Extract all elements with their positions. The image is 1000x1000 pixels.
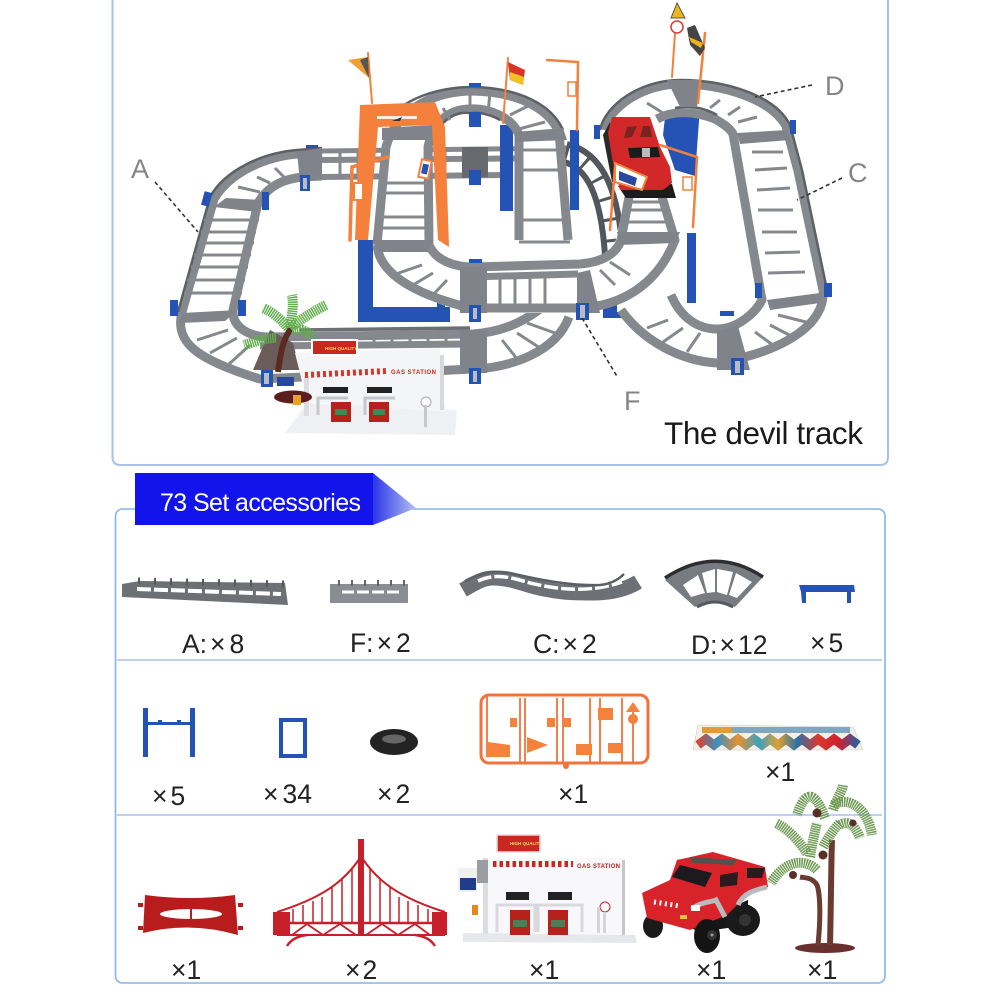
label row 2: ×1 (765, 757, 795, 787)
callout: A (131, 154, 198, 232)
grey joint blocks (180, 80, 820, 373)
part C: S-curved track (463, 572, 638, 593)
back straight track (322, 147, 614, 255)
panel: devil track frame (112, 0, 888, 465)
label row 1: C:×2 (533, 629, 597, 659)
flags and street signs (348, 3, 705, 130)
panel: accessories (116, 509, 885, 983)
part: blue clip (799, 585, 855, 603)
part: blue H frame (143, 708, 195, 757)
part: tire (370, 729, 418, 755)
part: orange sprue of flags (481, 695, 648, 769)
heading: the devil track: The devil track (664, 415, 863, 451)
part: gas station: HIGH QUALITY (510, 841, 542, 846)
part: red toy car (642, 852, 768, 953)
label row 3: ×1 (696, 955, 726, 985)
S curve track in front (373, 197, 680, 313)
callout: F (582, 318, 640, 416)
orange gate (350, 102, 449, 247)
part: sticker sheet (693, 725, 863, 750)
label row 3: ×1 (807, 955, 837, 985)
banner: 73 Set accessories (135, 473, 416, 525)
label row 1: A:×8 (182, 629, 244, 659)
callout: F: F (624, 386, 640, 416)
gas station: HIGH QUALITY (325, 346, 357, 351)
callout: C: C (848, 158, 868, 188)
label row 1: ×5 (810, 628, 843, 658)
red car on track (603, 117, 697, 230)
track section C and D: right loop (600, 80, 827, 367)
palm tree on hill (244, 295, 326, 372)
middle top arc and ladders (373, 87, 572, 245)
part F: short track (330, 583, 408, 603)
part: palm tree (771, 785, 872, 953)
label row 3: ×1 (529, 955, 559, 985)
part: gas station (458, 835, 637, 943)
blue posts of the middle loop (500, 125, 579, 211)
label row 2 (152, 757, 795, 811)
part: red suspension bridge (273, 839, 447, 946)
part: red bridge deck (138, 895, 243, 935)
label row 3: ×2 (345, 955, 377, 985)
part: gas station: GAS STATION (577, 864, 620, 870)
callout: A: A (131, 154, 149, 184)
label row 2: ×5 (152, 781, 185, 811)
track section A: left loop (177, 148, 573, 383)
callout: D (755, 71, 844, 101)
blue support towers behind the track (358, 100, 700, 322)
gas station (274, 340, 457, 435)
label row 2: ×1 (558, 779, 588, 809)
part D: curved track (665, 561, 763, 607)
label row 3: ×1 (171, 955, 201, 985)
label row 2: ×2 (377, 779, 410, 809)
part A: straight track (122, 581, 288, 605)
part: blue rectangle frame (281, 720, 305, 756)
callout: C (797, 158, 868, 200)
banner: 73 Set accessories: 73 Set accessories (160, 489, 361, 517)
blue track clips (170, 83, 832, 387)
label row 1: F:×2 (350, 628, 411, 658)
label row 2: ×34 (263, 779, 312, 809)
gas station: GAS STATION (391, 370, 436, 376)
label row 1: D:×12 (691, 630, 767, 660)
label row 3 (171, 955, 837, 985)
label row 1 (182, 628, 843, 660)
track layout illustration (170, 3, 832, 435)
callout: D: D (825, 71, 844, 101)
